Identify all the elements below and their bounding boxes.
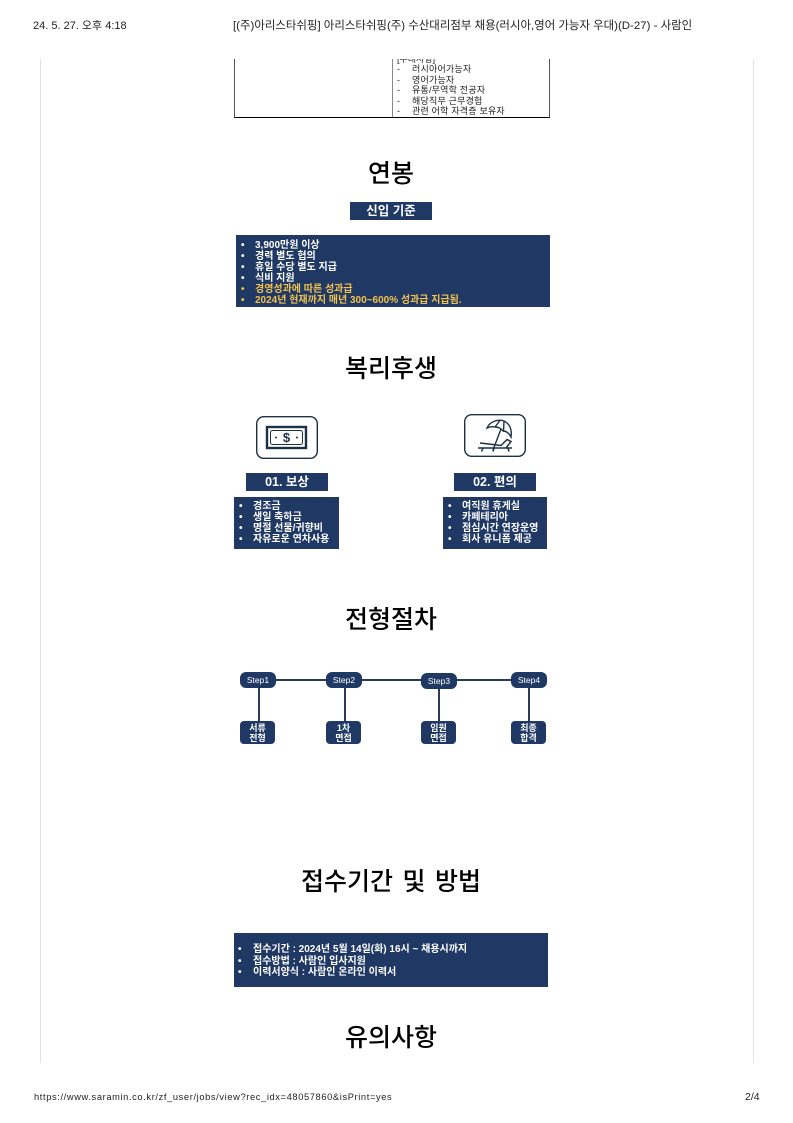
- panel: salary details: •: [241, 295, 245, 306]
- qualification table fragment: [234, 59, 550, 118]
- label: new hire basis: [350, 202, 432, 220]
- process flow chart: Step3: [428, 676, 450, 686]
- label: convenience: 02. 편의: [473, 475, 517, 489]
- panel: application details: 접수방법 : 사람인 입사지원: [253, 956, 366, 967]
- panel: salary details: 2024년 현재까지 매년 300~600% 성과급 지급됨.: [255, 295, 462, 306]
- process flow chart: 1차: [337, 722, 350, 732]
- panel: compensation list: 자유로운 연차사용: [253, 534, 329, 545]
- panel: application details: •: [238, 967, 242, 978]
- panel: compensation list: 경조금: [253, 501, 281, 512]
- preferred qualifications list: -: [397, 96, 400, 106]
- heading: benefits: 복리후생: [345, 355, 437, 383]
- panel: convenience list: 카페테리아: [462, 512, 508, 523]
- panel: convenience list: •: [448, 534, 452, 545]
- panel: compensation list: •: [239, 523, 243, 534]
- panel: convenience list: •: [448, 501, 452, 512]
- panel: salary details: 경력 별도 협의: [255, 251, 316, 262]
- icon: money bill: [256, 416, 318, 459]
- panel: application details: •: [238, 956, 242, 967]
- panel: application details: 이력서양식 : 사람인 온라인 이력서: [253, 967, 396, 978]
- panel: convenience list: 회사 유니폼 제공: [462, 534, 532, 545]
- label: new hire basis: 신입 기준: [366, 204, 416, 218]
- process flow chart: 합격: [520, 733, 537, 743]
- panel: salary details: 휴일 수당 별도 지급: [255, 262, 337, 273]
- panel: convenience list: 점심시간 연장운영: [462, 523, 538, 534]
- panel: compensation list: 명절 선물/귀향비: [253, 523, 323, 534]
- page header date: 24. 5. 27. 오후 4:18: [33, 20, 127, 32]
- page header title: [(주)아리스타쉬핑] 아리스타쉬핑(주) 수산대리점부 채용(러시아,영어 가능자 우대)(D-27) - 사람인: [233, 20, 692, 32]
- heading: hiring process: 전형절차: [345, 606, 437, 634]
- process flow chart: 면접: [430, 733, 447, 743]
- preferred qualifications list: -: [397, 85, 400, 95]
- page footer url: https://www.saramin.co.kr/zf_user/jobs/view?rec_idx=48057860&isPrint=yes: [34, 1092, 392, 1102]
- preferred qualifications list: -: [397, 75, 400, 85]
- process flow chart: [240, 672, 547, 744]
- preferred qualifications list: 영어가능자: [412, 75, 454, 85]
- panel: compensation list: [234, 497, 339, 549]
- panel: salary details: •: [241, 273, 245, 284]
- preferred qualifications list: 해당직무 근무경험: [412, 96, 483, 106]
- process flow chart: Step2: [333, 675, 355, 685]
- panel: salary details: •: [241, 251, 245, 262]
- label: convenience: [454, 473, 536, 491]
- heading: application period and method: 접수기간 및 방법: [301, 868, 481, 896]
- label: compensation: [246, 473, 328, 491]
- heading: notes: 유의사항: [345, 1024, 437, 1052]
- preferred qualifications list: -: [397, 64, 400, 74]
- preferred qualifications list: 유통/무역학 전공자: [412, 85, 485, 95]
- panel: convenience list: •: [448, 523, 452, 534]
- page footer number: 2/4: [745, 1091, 760, 1103]
- panel: salary details: •: [241, 262, 245, 273]
- panel: salary details: 3,900만원 이상: [255, 240, 320, 251]
- panel: salary details: [236, 235, 550, 307]
- panel: salary details: 식비 지원: [255, 273, 295, 284]
- preferred qualifications list: 관련 어학 자격증 보유자: [412, 106, 505, 116]
- process flow chart: 임원: [430, 722, 447, 732]
- label: compensation: 01. 보상: [265, 475, 309, 489]
- process flow chart: Step1: [247, 675, 269, 685]
- panel: application details: •: [238, 944, 242, 955]
- panel: compensation list: •: [239, 501, 243, 512]
- heading: salary: 연봉: [368, 160, 414, 188]
- panel: salary details: •: [241, 284, 245, 295]
- icon: beach umbrella and lounger: [464, 414, 526, 457]
- process flow chart: 서류: [249, 722, 266, 732]
- icon: money bill: $: [283, 430, 291, 445]
- panel: salary details: •: [241, 240, 245, 251]
- process flow chart: 면접: [335, 733, 352, 743]
- panel: compensation list: •: [239, 512, 243, 523]
- panel: application details: 접수기간 : 2024년 5월 14일(화) 16시 ~ 채용시까지: [253, 944, 467, 955]
- panel: convenience list: [443, 497, 547, 549]
- page left border: [40, 59, 41, 1063]
- panel: convenience list: •: [448, 512, 452, 523]
- process flow chart: Step4: [518, 675, 540, 685]
- preferred qualifications list: 러시아어가능자: [412, 64, 471, 74]
- panel: convenience list: 여직원 휴게실: [462, 501, 520, 512]
- table column divider: [392, 59, 393, 117]
- page right border: [753, 59, 754, 1063]
- panel: application details: [234, 933, 548, 987]
- panel: compensation list: 생일 축하금: [253, 512, 302, 523]
- preferred qualifications list: -: [397, 106, 400, 116]
- panel: salary details: 경영성과에 따른 성과급: [255, 284, 353, 295]
- preferred qualifications list: [397, 59, 505, 116]
- process flow chart: 전형: [249, 733, 266, 743]
- process flow chart: 최종: [520, 722, 537, 732]
- panel: compensation list: •: [239, 534, 243, 545]
